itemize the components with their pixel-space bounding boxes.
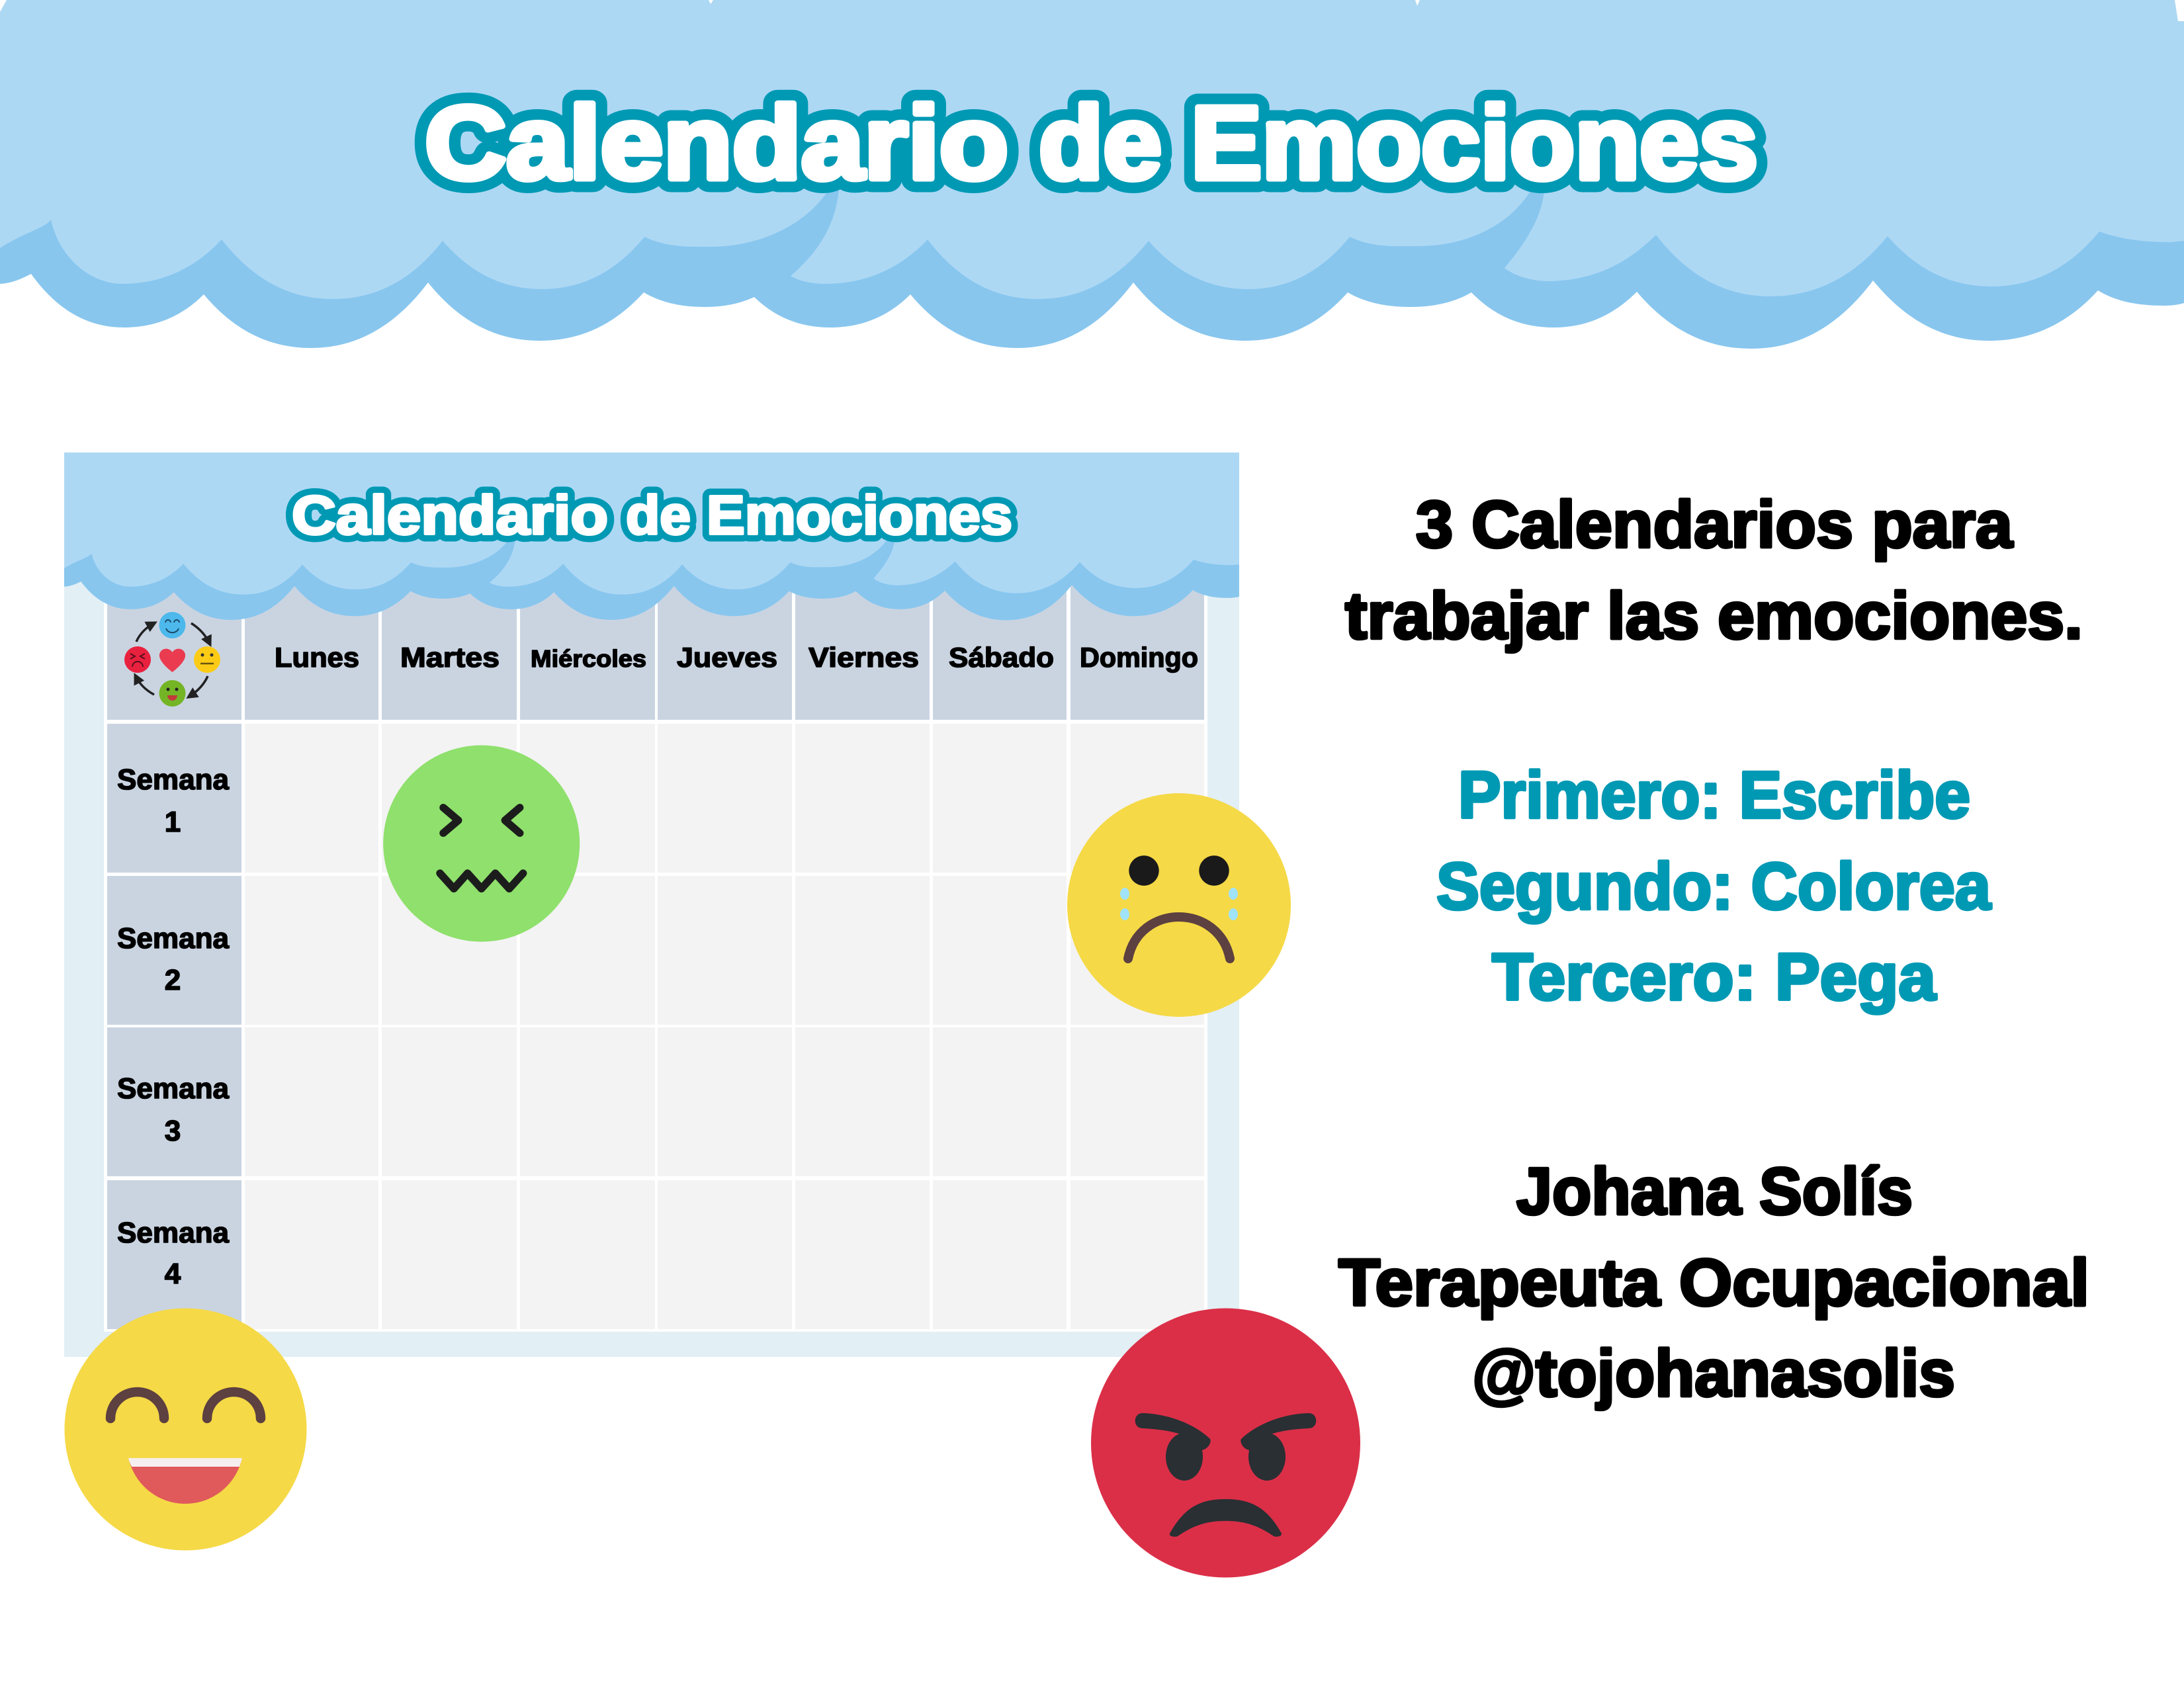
inner title: Calendario	[292, 484, 608, 546]
icon: green grimacing face	[383, 745, 580, 942]
text block: intro: trabajar las emociones.	[1345, 579, 2083, 653]
day headers: Jueves	[677, 642, 777, 673]
header cloud banner	[0, 0, 2184, 349]
week labels: 3	[165, 1115, 181, 1147]
text block: steps: Tercero: Pega	[1492, 940, 1937, 1014]
text block: author	[1338, 1154, 2089, 1410]
day headers: Viernes	[808, 642, 919, 673]
inner title: Emociones	[707, 484, 1012, 546]
day headers	[275, 642, 1198, 673]
week labels: Semana	[117, 763, 230, 796]
day headers: Sábado	[949, 642, 1054, 673]
inner title: Calendario	[292, 484, 608, 546]
day headers: Domingo	[1080, 642, 1198, 673]
week labels: Semana	[117, 1217, 230, 1249]
day headers: Martes	[400, 642, 500, 673]
text block: author: Terapeuta Ocupacional	[1338, 1246, 2089, 1320]
inner title: Emociones	[707, 484, 1012, 546]
week labels: Semana	[117, 922, 230, 955]
inner title: de	[626, 484, 691, 546]
text block: intro	[1345, 488, 2083, 653]
title: Calendario	[425, 85, 1008, 201]
icon: happy face	[65, 1309, 307, 1551]
text block: intro: 3 Calendarios para	[1416, 488, 2013, 562]
text block: steps: Primero: Escribe	[1458, 758, 1970, 832]
title	[425, 85, 1758, 201]
week labels	[117, 763, 230, 1290]
icon: crying face	[1067, 793, 1291, 1017]
day headers: Miércoles	[531, 645, 646, 672]
text block: steps: Segundo: Colorea	[1436, 849, 1991, 924]
title: Emociones	[1191, 85, 1758, 201]
panel: calendar preview	[64, 440, 1239, 1357]
inner title	[292, 484, 1012, 546]
title: de	[1039, 85, 1162, 201]
text block: steps	[1436, 758, 1991, 1014]
title: de	[1039, 85, 1162, 201]
title: Calendario	[425, 85, 1008, 201]
inner cloud banner	[64, 440, 1239, 620]
day headers: Lunes	[275, 642, 359, 673]
calendar grid	[104, 569, 1207, 1332]
inner title: de	[626, 484, 691, 546]
text block: author: @tojohanasolis	[1472, 1336, 1955, 1410]
week labels: Semana	[117, 1072, 230, 1105]
week labels: 4	[165, 1258, 181, 1290]
icon: emotion cycle	[124, 612, 220, 707]
icon: angry face	[1091, 1309, 1360, 1577]
week labels: 2	[165, 964, 181, 996]
title: Emociones	[1191, 85, 1758, 201]
week labels: 1	[165, 806, 181, 838]
text block: author: Johana Solís	[1516, 1154, 1913, 1229]
